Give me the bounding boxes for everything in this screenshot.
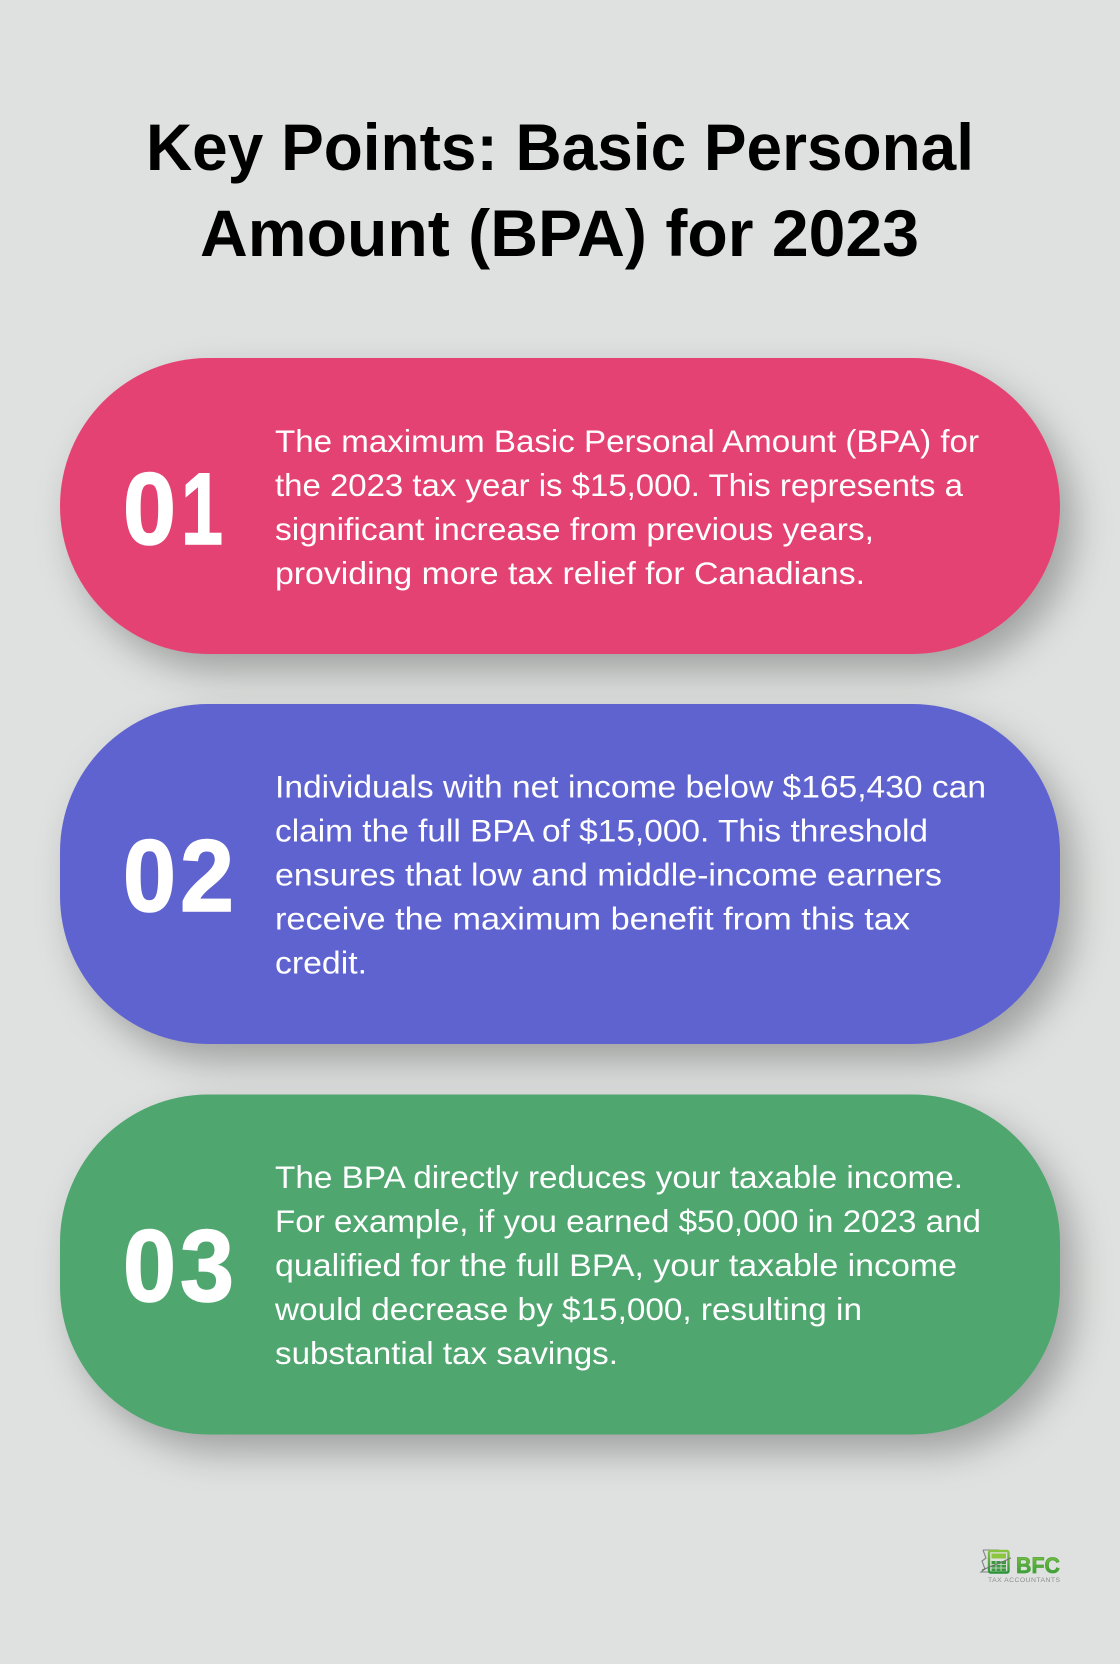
number 03: 3: [180, 1209, 234, 1323]
logo tagline: TAX ACCOUNTANTS: [988, 1577, 1060, 1584]
panel: point 02: [60, 704, 1060, 1044]
text block: point 03: would decrease by $15,000, resulting in: [274, 1291, 862, 1327]
text block: point 02: claim the full BPA of $15,000. This threshold: [275, 812, 928, 848]
logo: BFC Tax Accountants: [981, 1550, 1060, 1584]
number 03: [123, 1209, 234, 1323]
title: Amount (BPA) for 2023: [200, 196, 919, 270]
text block: point 02: ensures that low and middle-income earners: [275, 856, 942, 892]
text block: point 03: substantial tax savings.: [275, 1335, 618, 1371]
panel: point 01: [60, 358, 1060, 654]
text block: point 01: significant increase from previous years,: [275, 511, 874, 547]
text block: point 03: For example, if you earned $50,000 in 2023 and: [275, 1203, 981, 1239]
text block: point 03: The BPA directly reduces your taxable income.: [275, 1159, 963, 1195]
number 01: [123, 452, 223, 566]
text block: point 02: Individuals with net income below $165,430 can: [275, 768, 986, 804]
text block: point 01: The maximum Basic Personal Amount (BPA) for: [275, 423, 979, 459]
text block: point 01: the 2023 tax year is $15,000. This represents a: [275, 467, 963, 503]
pill background: pink: [60, 358, 1060, 654]
logo wordmark: BFC: [1016, 1553, 1060, 1578]
number 02: [123, 819, 234, 933]
text block: point 03: [274, 1159, 981, 1371]
text block: point 02: credit.: [275, 944, 367, 980]
icon: calculator with papers: [981, 1550, 1011, 1572]
text block: point 01: [275, 423, 979, 591]
text block: point 02: receive the maximum benefit from this tax: [275, 900, 910, 936]
title: Key Points: Basic Personal: [146, 110, 974, 184]
text block: point 01: providing more tax relief for Canadians.: [275, 555, 865, 591]
number 01: 0: [123, 452, 176, 566]
panel: point 03: [60, 1094, 1060, 1434]
pill background: blue: [60, 704, 1060, 1044]
number 02: 0: [123, 819, 176, 933]
pill background: green: [60, 1094, 1060, 1434]
title: [146, 110, 974, 270]
text block: point 03: qualified for the full BPA, your taxable income: [275, 1247, 957, 1283]
number 03: 0: [123, 1209, 176, 1323]
number 02: 2: [180, 819, 234, 933]
text block: point 02: [275, 768, 986, 980]
number 01: 1: [181, 452, 223, 566]
